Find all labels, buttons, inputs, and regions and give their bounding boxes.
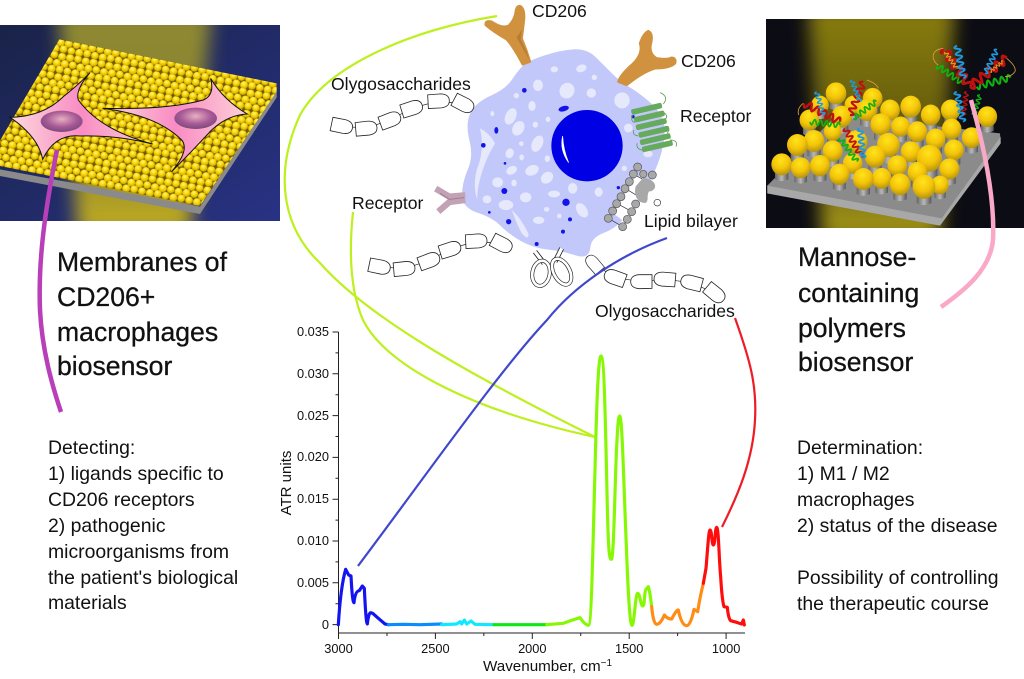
text block: determination: 2) status of the disease xyxy=(797,515,998,537)
x axis numbers xyxy=(324,641,740,656)
cell labels: Olygosaccharides xyxy=(595,301,735,321)
organelle dots xyxy=(481,88,635,246)
text block: determination: Determination: xyxy=(797,437,923,459)
y axis numbers xyxy=(297,324,329,632)
text block: detecting: 1) ligands specific to xyxy=(48,463,224,485)
oligosaccharide chain lower right xyxy=(583,253,728,306)
cell left xyxy=(10,73,153,159)
y axis numbers: 0.035 xyxy=(297,324,329,339)
x axis numbers: 3000 xyxy=(324,641,353,656)
cell labels: Receptor xyxy=(680,106,752,126)
connector: yellow-green CD206 line to spectrum xyxy=(285,16,595,437)
protein cluster right xyxy=(933,45,1015,122)
x axis numbers: 2000 xyxy=(518,641,547,656)
text block: detecting: Detecting: xyxy=(48,437,135,459)
macrophage cell illustration xyxy=(330,6,728,306)
connector: red oligosaccharide line to spectrum xyxy=(722,318,755,527)
oligosaccharide chain lower left xyxy=(368,233,515,277)
connector: blue lipid line to spectrum xyxy=(358,238,667,566)
connector: purple line xyxy=(40,150,61,412)
lipid bilayer xyxy=(604,163,661,231)
pink Y receptor xyxy=(436,189,465,212)
heading: membranes biosensor: Membranes of xyxy=(57,247,228,277)
text block: determination: macrophages xyxy=(797,489,914,511)
cell labels: CD206 xyxy=(681,51,736,71)
y axis numbers: 0.010 xyxy=(297,533,329,548)
y axis numbers: 0.015 xyxy=(297,491,329,506)
y axis numbers: 0.005 xyxy=(297,575,329,590)
chart: ATR spectrum xyxy=(278,324,745,675)
oligosaccharide chain upper left xyxy=(330,93,476,136)
connector: pink line xyxy=(941,100,993,307)
y axis numbers: 0.025 xyxy=(297,408,329,423)
spectrum trace xyxy=(338,356,744,626)
cell labels: Lipid bilayer xyxy=(644,211,738,231)
x axis numbers: 1000 xyxy=(712,641,740,656)
cell nucleus right xyxy=(174,108,217,129)
text block: determination: 1) M1 / M2 xyxy=(797,463,890,485)
text block: detecting: materials xyxy=(48,592,127,614)
x axis title: Wavenumber, cm xyxy=(483,658,601,675)
y axis title: ATR units xyxy=(278,451,295,515)
cell nucleus left xyxy=(41,111,83,132)
y axis numbers: 0.020 xyxy=(297,449,329,464)
protein cluster left xyxy=(798,79,878,163)
membrane loop protein xyxy=(530,248,575,288)
panel: gold nanoparticle membrane image xyxy=(0,25,280,221)
text block: determination: Possibility of controlling xyxy=(797,567,999,589)
text block: determination: the therapeutic course xyxy=(797,593,989,615)
heading: polymers biosensor: containing xyxy=(798,278,919,308)
x axis numbers: 1500 xyxy=(615,641,643,656)
nucleus xyxy=(551,110,623,181)
panel: gold nanopillar polymer image xyxy=(766,19,1024,228)
y axis numbers: 0.030 xyxy=(297,366,329,381)
connector: yellow-green receptor line to spectrum xyxy=(351,212,595,437)
CD206 receptor top xyxy=(486,6,530,64)
heading: membranes biosensor: macrophages xyxy=(57,317,218,347)
cell labels: Olygosaccharides xyxy=(331,74,471,94)
y axis numbers: 0 xyxy=(322,617,329,632)
heading: polymers biosensor: Mannose- xyxy=(798,242,916,272)
axes xyxy=(332,332,745,639)
heading: membranes biosensor: biosensor xyxy=(57,351,172,381)
cell right xyxy=(103,78,247,172)
cell labels xyxy=(331,1,752,321)
x axis numbers: 2500 xyxy=(421,641,450,656)
cell body xyxy=(463,51,663,255)
green transmembrane receptor xyxy=(631,93,677,152)
text block: detecting: 2) pathogenic xyxy=(48,515,166,537)
heading: membranes biosensor: CD206+ xyxy=(57,282,155,312)
heading: polymers biosensor: biosensor xyxy=(798,347,913,377)
text block: detecting: the patient's biological xyxy=(48,567,238,589)
cell labels: CD206 xyxy=(532,1,587,21)
x axis title: −1 xyxy=(601,658,612,669)
cell labels: Receptor xyxy=(352,193,424,213)
text block: detecting: CD206 receptors xyxy=(48,489,195,511)
CD206 receptor right xyxy=(618,31,675,85)
vesicles xyxy=(475,63,653,237)
text block: detecting: microorganisms from xyxy=(48,541,229,563)
heading: polymers biosensor: polymers xyxy=(798,313,906,343)
